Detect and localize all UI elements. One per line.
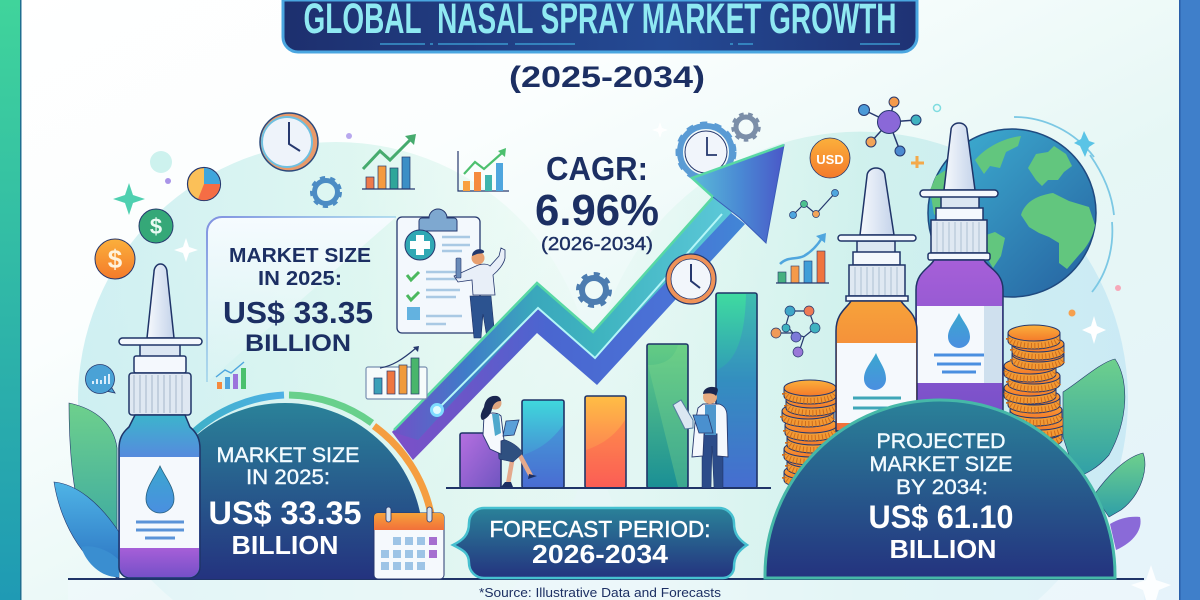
- icon: sparkle white: [174, 238, 198, 262]
- right leaves: [1063, 359, 1145, 550]
- figure: scientist man: [673, 387, 728, 488]
- icon: green dollar coin: [139, 209, 173, 243]
- decoration: purple dot upper: [346, 133, 352, 139]
- icon: small grey gear: [733, 114, 759, 140]
- lower background wash: [68, 579, 1144, 600]
- background blob left: [78, 142, 594, 600]
- icon: usd coin: USD: [816, 152, 844, 167]
- growth arrow: [392, 145, 784, 460]
- icon: growth chart one: [362, 134, 416, 189]
- sparkle near arrow: [652, 122, 668, 138]
- icon: molecule top: [858, 97, 921, 156]
- value: us$ 33.35: US$ 33.35: [223, 295, 373, 330]
- source note: *Source: Illustrative Data and Forecasts: [479, 585, 722, 600]
- globe orbit arcs: [1014, 117, 1114, 292]
- label: by 2034: BY 2034:: [896, 476, 988, 499]
- value: 6.96%: 6.96%: [535, 186, 659, 235]
- decoration: orange dot: [1068, 310, 1076, 316]
- decoration: ring: [934, 104, 940, 112]
- panel: market size dome: [147, 395, 431, 579]
- panel: market size upper box: [207, 217, 396, 382]
- cagr text block: [535, 150, 659, 254]
- label: cagr period: (2026-2034): [541, 234, 653, 254]
- coin stack left: [782, 380, 839, 488]
- icon: orange dollar coin: $: [108, 244, 123, 274]
- icon: green dollar coin: $: [150, 214, 162, 239]
- globe continents: [930, 136, 1095, 269]
- coin stack right: [1004, 325, 1066, 448]
- label: in 2025: IN 2025:: [246, 466, 330, 489]
- icon: sparkle green: [113, 183, 145, 215]
- arrow shaft upper band: [392, 197, 732, 440]
- arrow shaft lower band: [392, 208, 745, 460]
- bar chart: [446, 293, 771, 488]
- icon: central gear: [578, 274, 610, 306]
- corner sparkle: [1131, 565, 1171, 600]
- decoration: purple dot: [165, 178, 171, 184]
- ground line: [68, 578, 1144, 580]
- label: billion: BILLION: [232, 530, 338, 560]
- title banner: [283, 0, 917, 52]
- label: billion: BILLION: [890, 534, 996, 564]
- label: cagr: CAGR:: [546, 150, 648, 187]
- icon: usd coin: [810, 138, 850, 178]
- arrowhead: [692, 145, 784, 243]
- nasal spray bottle: orange: [836, 168, 917, 431]
- icon: chart speech bubble: [86, 364, 115, 394]
- icon: growth chart two: [458, 148, 509, 191]
- icon: plus: [911, 156, 924, 168]
- figure: man at clipboard: [454, 248, 505, 338]
- label: billion: BILLION: [245, 330, 351, 357]
- label: projected: PROJECTED: [876, 430, 1006, 453]
- icon: line graph: [790, 190, 838, 218]
- decoration: pink dot: [1115, 285, 1121, 291]
- label: market size: MARKET SIZE: [870, 453, 1012, 476]
- icon: wall clock: [260, 113, 318, 171]
- background blob right: [592, 132, 1128, 600]
- icon: cyan star: [1074, 131, 1095, 157]
- label: market size: MARKET SIZE: [216, 444, 360, 467]
- right side stripe: [1179, 0, 1200, 600]
- icon: clipboard: [397, 209, 480, 333]
- icon: blue gear: [312, 178, 340, 206]
- icon: globe: [928, 129, 1096, 297]
- icon: molecule lower: [771, 306, 820, 357]
- icon: gear clock: [678, 124, 734, 180]
- figure: seated woman: [481, 396, 537, 487]
- nasal spray bottle: blue left: [119, 264, 202, 578]
- icon: small rising bars: [776, 233, 829, 283]
- gauge ring: [194, 395, 431, 514]
- arrow light streak: [437, 214, 722, 410]
- decoration: pale bubble: [150, 151, 172, 173]
- icon: framed bar chart: [366, 346, 427, 399]
- arrowhead top edge: [692, 145, 784, 197]
- panel: projected market size dome: [765, 400, 1115, 578]
- arrow edge highlights: [394, 197, 713, 430]
- icon: small bars: [216, 362, 246, 389]
- subtitle: (2025-2034): [509, 61, 705, 94]
- value: us$ 61.10: US$ 61.10: [868, 499, 1014, 535]
- value: 2026-2034: 2026-2034: [532, 539, 669, 569]
- label: in 2025: IN 2025:: [258, 268, 342, 290]
- label: market size: MARKET SIZE: [229, 245, 371, 267]
- panel: forecast period: [453, 508, 747, 578]
- icon: white sparkle right: [1082, 316, 1106, 344]
- left side stripe: [0, 0, 22, 600]
- left leaves: [54, 403, 119, 578]
- label: forecast period: FORECAST PERIOD:: [490, 516, 710, 542]
- icon: calendar: [374, 507, 444, 579]
- icon: pie chart: [188, 168, 220, 200]
- icon: clock on chart: [666, 254, 716, 304]
- nasal spray bottle: purple: [916, 123, 1003, 420]
- arrow glow: [432, 404, 442, 416]
- value: us$ 33.35: US$ 33.35: [208, 495, 362, 531]
- icon: orange dollar coin: [95, 239, 135, 279]
